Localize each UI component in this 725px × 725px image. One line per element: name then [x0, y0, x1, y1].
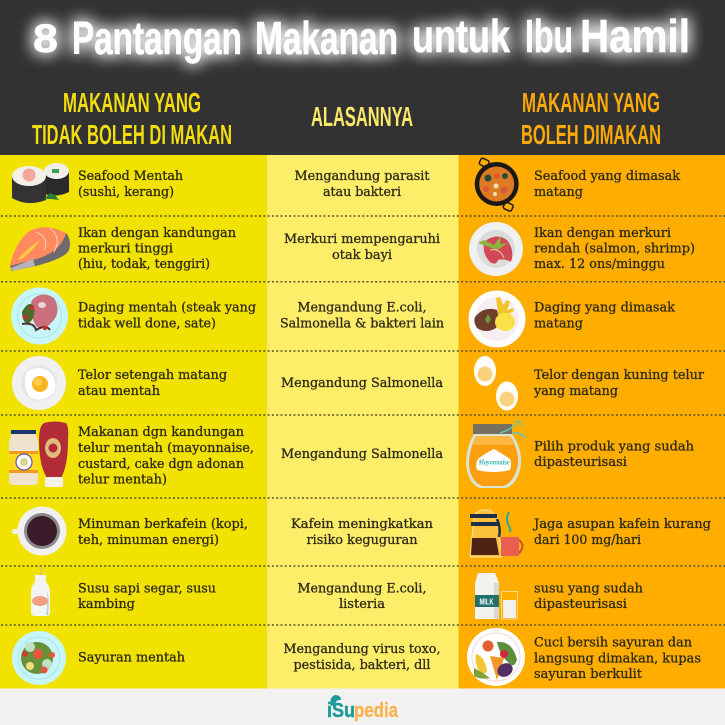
text: allowed items: dari 100 mg/hari [534, 533, 641, 548]
text: allowed items: Seafood yang dimasak [534, 169, 680, 184]
text: reasons: Mengandung parasit [294, 169, 430, 184]
text: allowed items: Cuci bersih sayuran dan [534, 636, 693, 651]
text: not allowed items: (hiu, todak, tenggiri) [78, 257, 210, 272]
icon: coffee maker and red mug [470, 510, 522, 557]
text: not allowed items: Susu sapi segar, susu [78, 582, 216, 597]
text: reasons: risiko keguguran [306, 533, 418, 548]
icon: milk carton and glass: MILK [480, 598, 494, 606]
text: not allowed items: telur mentah) [78, 472, 167, 488]
text: not allowed items: atau mentah [78, 384, 161, 399]
text: not allowed items: Seafood Mentah [78, 169, 184, 184]
icon: raw steak plate [11, 288, 68, 344]
text: not allowed items: merkuri tinggi [78, 242, 173, 257]
icon: cooked fish plate [469, 222, 523, 276]
text: allowed items: Jaga asupan kafein kurang [532, 517, 711, 532]
text: not allowed items: Telor setengah matang [78, 368, 227, 383]
text: allowed items: dipasteurisasi [534, 597, 627, 612]
text: reasons: otak bayi [332, 248, 392, 263]
title: Makanan [255, 12, 398, 64]
text: not allowed items: Makanan dgn kandungan [78, 425, 245, 440]
footer band [0, 688, 725, 725]
text: reasons: Mengandung E.coli, [298, 301, 426, 316]
text: not allowed items: telur mentah (mayonnaise, [78, 441, 254, 456]
text: not allowed items: custard, cake dgn adonan [78, 457, 245, 472]
icon: raw salad plate [12, 631, 66, 685]
text: allowed items: matang [534, 185, 583, 200]
logo: iSupedia: pedia [354, 700, 399, 722]
text: not allowed items: Sayuran mentah [78, 651, 186, 666]
text: not allowed items [78, 169, 256, 666]
text: reasons: Kafein meningkatkan [291, 517, 434, 532]
text: reasons [280, 169, 445, 673]
text: not allowed items: teh, minuman energi) [78, 533, 219, 548]
icon: fresh milk bottle [31, 566, 50, 616]
icon: fried egg plate [12, 356, 66, 410]
title: Hamil [580, 10, 690, 62]
heading: foods not allowed [32, 87, 232, 150]
heading: foods not allowed: MAKANAN YANG [63, 87, 201, 118]
title: untuk [412, 10, 510, 62]
text: reasons: Mengandung virus toxo, [284, 642, 440, 657]
text: allowed items: rendah (salmon, shrimp) [534, 242, 695, 257]
text: allowed items: yang matang [533, 384, 618, 399]
icon: vegetables plate [467, 628, 525, 686]
heading: reasons: ALASANNYA [311, 101, 413, 132]
icon: mayonnaise jar: Mayonnaise [478, 458, 510, 466]
icon: milk carton and glass [475, 573, 518, 619]
text: not allowed items: Ikan dengan kandungan [78, 226, 237, 241]
text: allowed items [532, 169, 711, 682]
text: allowed items: Ikan dengan merkuri [534, 226, 671, 241]
text: allowed items: susu yang sudah [534, 582, 644, 597]
text: reasons: listeria [339, 597, 385, 612]
heading: foods not allowed: TIDAK BOLEH DI MAKAN [32, 119, 232, 150]
text: allowed items: sayuran berkulit [534, 667, 643, 682]
text: not allowed items: Daging mentah (steak yang [78, 301, 256, 316]
header band [0, 0, 725, 155]
text: allowed items: matang [534, 316, 583, 332]
text: reasons: atau bakteri [323, 185, 401, 200]
text: allowed items: Pilih produk yang sudah [534, 440, 695, 455]
icon: raw salmon [10, 227, 70, 271]
text: allowed items: langsung dimakan, kupas [534, 652, 701, 666]
title [33, 10, 690, 64]
text: reasons: pestisida, bakteri, dll [294, 658, 430, 673]
text: reasons: Salmonella & bakteri lain [280, 316, 445, 332]
icon: mayonnaise jar and ketchup bottle [9, 422, 68, 487]
icon: coffee cup [12, 506, 66, 556]
icon: cooked steak plate [468, 290, 526, 348]
panel: reasons column [267, 155, 458, 688]
text: allowed items: max. 12 ons/minggu [534, 257, 665, 272]
text: allowed items: dipasteurisasi [534, 455, 627, 470]
text: reasons: Mengandung Salmonella [281, 376, 443, 391]
icon: boiled eggs [474, 356, 518, 410]
text: reasons: Mengandung Salmonella [281, 447, 443, 462]
panel: not allowed column [0, 155, 267, 688]
icon: mayonnaise jar [466, 422, 525, 488]
title: 8 [33, 17, 58, 61]
panel: allowed column [458, 155, 725, 688]
text: allowed items: Telor dengan kuning telur [534, 368, 705, 383]
logo: iSupedia: iSu [327, 700, 355, 722]
text: reasons: Merkuri mempengaruhi [284, 232, 440, 247]
text: not allowed items: (sushi, kerang) [78, 185, 174, 200]
title: Pantangan [72, 12, 242, 64]
heading: foods allowed [521, 87, 661, 150]
icon: paella pan [475, 158, 519, 212]
text: not allowed items: Minuman berkafein (kopi, [78, 517, 248, 532]
title: Ibu [525, 10, 573, 62]
text: not allowed items: tidak well done, sate) [78, 316, 216, 332]
text: allowed items: Daging yang dimasak [534, 301, 675, 316]
logo: iSupedia [327, 695, 399, 722]
icon: sushi [12, 163, 69, 203]
text: not allowed items: kambing [78, 597, 135, 612]
text: reasons: Mengandung E.coli, [298, 582, 426, 597]
